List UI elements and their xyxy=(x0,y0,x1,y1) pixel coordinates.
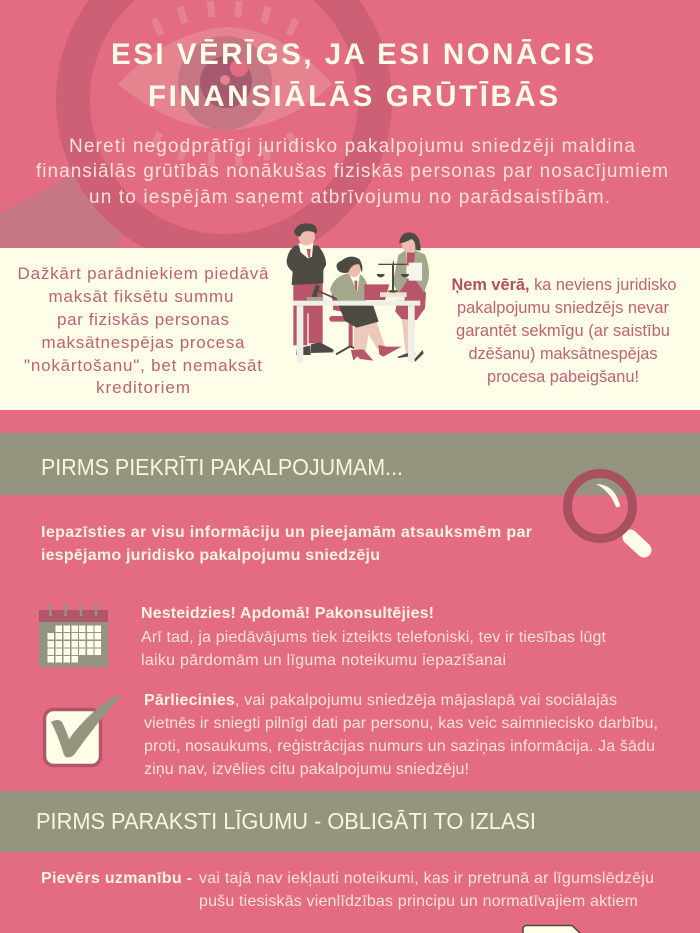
table with laptop, gavel, scales xyxy=(292,258,420,362)
heading band: before signing: PIRMS PARAKSTI LĪGUMU - OBLIGĀTI TO IZLASI xyxy=(36,808,536,834)
icon: checkbox with tick xyxy=(44,694,120,766)
text: pay attention: vai tajā nav iekļauti noteikumi, kas ir pretrunā ar līgumslēdzēju xyxy=(199,870,654,887)
text: right warning xyxy=(452,275,676,386)
text: right warning: pakalpojumu sniedzējs nevar xyxy=(457,298,669,317)
title xyxy=(111,38,594,113)
text: right warning: garantēt sekmīgu (ar saistību xyxy=(456,321,670,340)
intro text: Nereti negodprātīgi juridisko pakalpojumu sniedzēji maldina xyxy=(69,136,635,157)
heading band: before agreeing xyxy=(0,433,700,495)
text: make sure: ziņu nav, izvēlies citu pakalpojumu sniedzēju! xyxy=(144,761,469,778)
text: left warning: par fiziskās personas xyxy=(57,310,229,329)
text: make sure: vietnēs ir sniegti pilnīgi dati par personu, kas veic saimniecisko darbību, xyxy=(144,715,658,732)
title: FINANSIĀLĀS GRŪTĪBĀS xyxy=(148,80,558,113)
chair xyxy=(329,278,365,354)
text: left warning xyxy=(18,264,269,397)
text: make sure xyxy=(144,692,658,778)
illustration: lawyers at desk xyxy=(287,223,429,362)
text: left warning: Dažkārt parādniekiem piedāvā xyxy=(18,264,269,283)
text: left warning: "nokārtošanu", bet nemaksāt xyxy=(24,356,262,375)
title: ESI VĒRĪGS, JA ESI NONĀCIS xyxy=(111,38,594,71)
background illustration: magnifier with eye xyxy=(0,0,375,251)
text: do not hurry: laiku pārdomām un līguma noteikumu iepazīšanai xyxy=(141,652,506,669)
icon: calendar xyxy=(39,604,108,667)
text: right warning: Ņem vērā, ka neviens juridisko xyxy=(452,275,676,294)
text: research the provider: Iepazīsties ar visu informāciju un pieejamām atsauksmēm par xyxy=(41,524,532,541)
text: left warning: maksātnespējas procesa xyxy=(42,333,245,352)
text: left warning: maksāt fiksētu summu xyxy=(48,287,234,306)
intro text: un to iespējām saņemt atbrīvojumu no parādsaistībām. xyxy=(89,187,610,208)
standing man xyxy=(287,223,333,355)
text: make sure: Pārliecinies, vai pakalpojumu sniedzēja mājaslapā vai sociālajās xyxy=(144,692,617,709)
heading band: before agreeing: PIRMS PIEKRĪTI PAKALPOJUMAM... xyxy=(41,454,403,480)
text: research the provider: iespējamo juridisko pakalpojumu sniedzēju xyxy=(41,547,380,564)
icon: document xyxy=(523,926,581,933)
text: pay attention: pušu tiesiskās vienlīdzības principu un normatīvajiem aktiem xyxy=(199,893,638,910)
standing woman xyxy=(393,232,429,362)
heading band: before signing xyxy=(0,791,700,852)
text: do not hurry: Nesteidzies! Apdomā! Pakonsultējies! xyxy=(141,605,434,622)
text: right warning: dzēšanu) maksātnespējas xyxy=(468,344,658,363)
text: do not hurry xyxy=(141,605,607,669)
intro text xyxy=(36,136,668,208)
text: do not hurry: Arī tad, ja piedāvājums tiek izteikts telefoniski, tev ir tiesības lūgt xyxy=(141,629,607,646)
intro text: finansiālās grūtībās nonākušas fiziskās personas par nosacījumiem xyxy=(36,161,668,182)
text: research the provider xyxy=(41,524,532,564)
seated woman xyxy=(330,257,402,361)
text: make sure: proti, nosaukums, reģistrācijas numurs un saziņas informācija. Ja šādu xyxy=(144,737,655,755)
text: left warning: kreditoriem xyxy=(96,378,190,397)
cream band xyxy=(0,248,700,410)
text: pay attention xyxy=(41,870,654,910)
icon: magnifying glass xyxy=(568,474,644,550)
text: pay attention: Pievērs uzmanību - xyxy=(41,870,192,887)
text: right warning: procesa pabeigšanu! xyxy=(487,367,639,386)
